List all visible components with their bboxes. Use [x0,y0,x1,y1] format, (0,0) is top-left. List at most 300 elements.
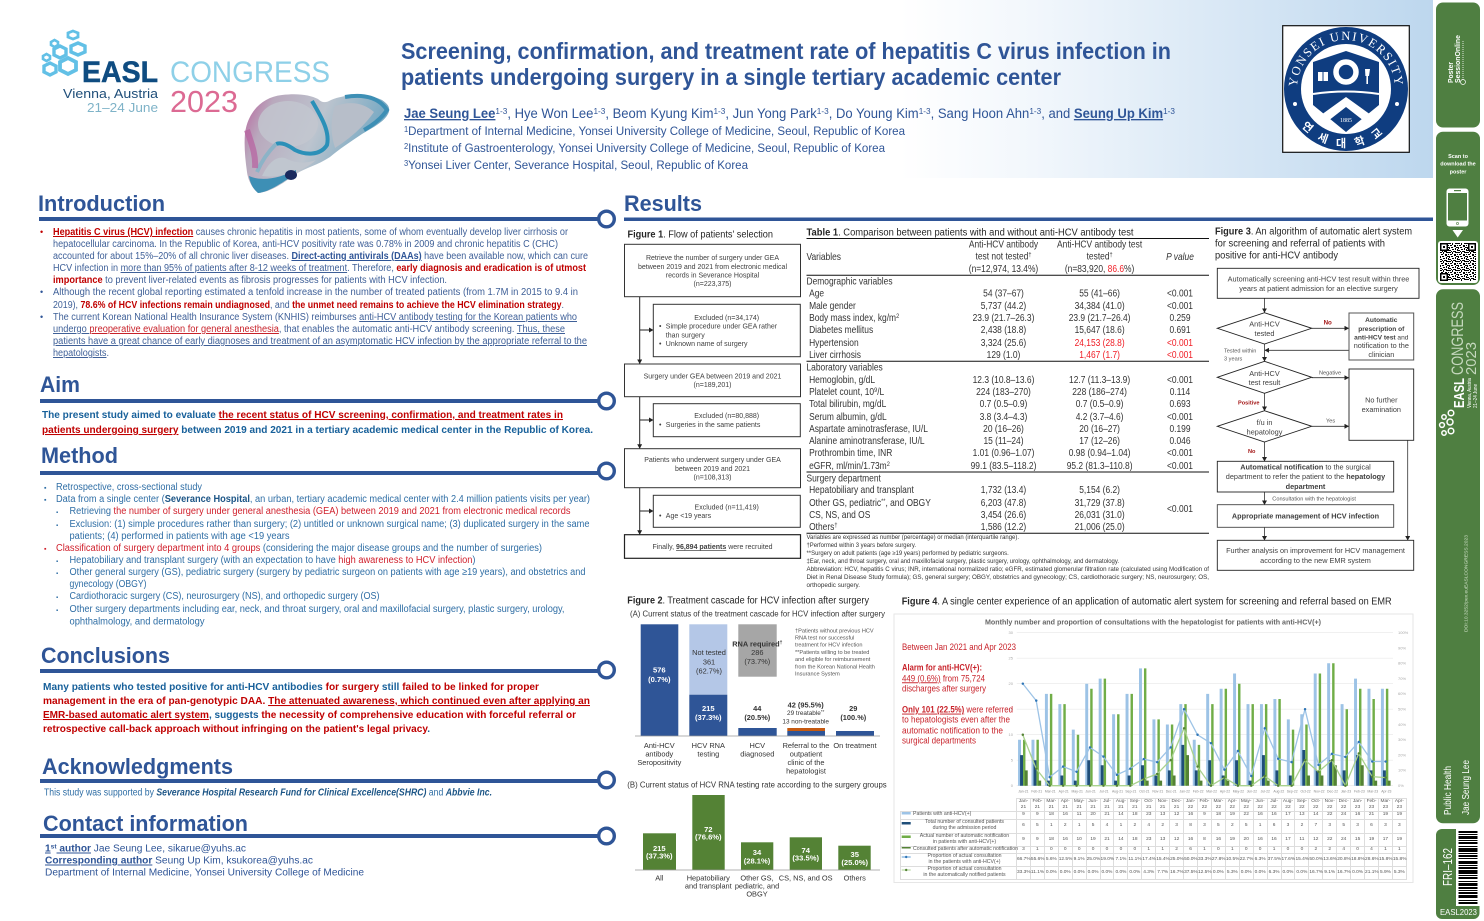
chart A: cascade bars: (0.7%) [648,675,671,684]
decision: follow-up in hepatology: f/u in [1257,418,1272,427]
row labels: Laboratory variables [806,362,883,373]
introduction bullets: accounted for about 15%–20% of all chronic liver diseases. Direct-acting antivirals (DAAs) have been available now, which can cure [53,251,588,262]
EASL wordmark: EASL [82,56,158,89]
table: monthly consultation data: 11.1% [1031,870,1044,875]
row labels: Demographic variables [806,276,893,287]
introduction bullets: Hepatitis C virus (HCV) infection causes chronic hepatitis in most patients, some of whom eventually develop liver cirrhosis or [53,227,569,238]
table: monthly consultation data: Jan- [1186,799,1195,804]
table: monthly consultation data: Mar- [1380,799,1390,804]
right axis labels: 100% [1398,630,1409,635]
row labels: Liver cirrhosis [809,350,861,360]
EASL2023 tag: EASL2023 [1440,907,1477,917]
column: tested: 0.98 (0.94–1.04) [1069,448,1130,458]
table: monthly consultation data: 1 [1147,847,1150,852]
column: tested [1057,239,1143,532]
left axis labels: 20 [1009,681,1014,686]
table: monthly consultation data: 21 [1049,805,1054,810]
column: P value: <0.001 [1167,350,1193,360]
table: monthly consultation data: 28.6% [1365,857,1379,862]
label: tested within 3 years [1224,349,1256,362]
table: monthly consultation data: 25.0% [1087,857,1100,862]
table: monthly consultation data: 23 [1355,805,1360,810]
table: monthly consultation data: 11 [1077,812,1082,817]
table: monthly consultation data: 1 [1036,847,1039,852]
Poster Session Online logo: Poster [1446,62,1455,83]
table: monthly consultation data: 7.7% [1157,870,1168,875]
column: not tested: † [1028,252,1031,259]
table: monthly consultation data: during the admission period [933,825,996,831]
box: automatic screening: Automatically screening anti-HCV test result within three [1228,274,1409,284]
label: Negative: Negative [1319,371,1341,377]
figure 4 caption: Figure 4. A single center experience of an application of automatic alert system for screening and referral based on EMR [902,596,1392,608]
conclusions text: EMR-based automatic alert system, suggests the necessity of comprehensive education with forceful referral or [43,709,576,721]
row labels: , and OBGY [885,498,931,508]
table: monthly consultation data: 16 [1355,812,1360,817]
table: monthly consultation data: Oct- [1311,799,1320,804]
decision: test result: Anti-HCV [1249,369,1280,378]
title [401,38,1171,90]
table: monthly consultation data: 3 [1175,823,1178,828]
bars: total consulted patients [1020,745,1386,786]
method list: Data from a single center (Severance Hospital, an urban, tertiary academic medical center with 2.4 million patients visits per year) [56,494,590,505]
table: monthly consultation data: 3 [1287,823,1289,828]
left axis labels: 15 [1009,706,1014,712]
row labels: CS, NS, and OS [809,510,870,520]
method list: gynecology (OBGY) [70,579,146,590]
table: monthly consultation data: 21 [1090,805,1096,810]
table: monthly consultation data: Jan- [1353,799,1362,804]
chart A: cascade bars: † [780,640,783,646]
logo: Yonsei University seal [1282,25,1410,153]
download caption: download the [1440,162,1476,168]
column: tested: 15,647 (18.6) [1075,325,1125,335]
table: monthly consultation data: 0.0% [1088,870,1099,875]
table: monthly consultation data: 22 [1188,805,1193,810]
table: monthly consultation data: Dec- [1172,799,1182,804]
table: monthly consultation data: 14 [1118,812,1124,817]
table footnotes: Variables are expressed as number (percentage) or median (interquartile range). [806,535,1019,541]
chart A: axis labels: outpatient [790,749,822,758]
table: monthly consultation data: Apr- [1061,799,1070,804]
table: monthly consultation data: 21 [1104,812,1110,817]
table: monthly consultation data: 2 [1301,823,1303,828]
chart A: axis labels: hepatologist [786,766,826,775]
section: Acknowledgments [40,754,614,798]
box: further analysis: according to the new EMR system [1260,556,1371,565]
month labels: Apr-22 [1220,790,1230,794]
month labels: Sep-21 [1125,790,1136,794]
method list: ▪ [56,571,58,577]
table: monthly consultation data: Proportion of actual consultation [927,866,1002,872]
table: monthly consultation data: 1 [1161,847,1164,852]
chart A: cascade bars: 361 [703,657,715,666]
table footnotes: orthopedic surgery. [806,583,860,589]
table footnotes: **Surgery on adult patients (age ≥19 years) performed by pediatric surgeons. [806,551,1009,557]
table: monthly consultation data: 0.0% [1282,870,1293,875]
table: monthly consultation data: 16.7% [1170,870,1184,875]
table: monthly consultation data: Sep- [1130,799,1140,804]
congress wordmark: 2023 [1463,342,1480,375]
chart A: axis labels: clinic of the [788,758,824,767]
conclusions text: retrospective call-back approach without infringing on the patient's legal privacy. [43,723,430,735]
column: not tested: 1.01 (0.96–1.07) [973,448,1034,458]
table: monthly consultation data: 9 [1022,812,1025,817]
month labels: Jan-23 [1341,790,1351,794]
month labels: Oct-22 [1301,790,1311,794]
introduction bullets: HCV infection in more than 95% of patients after 8-12 weeks of treatment. Therefore, early diagnosis and eradication is of utmost [53,263,587,274]
box: automatic prescription: clinician [1368,350,1394,359]
table: monthly consultation data: 22 [1327,805,1332,810]
flow box: excluded 34,174: than surgery [666,332,705,340]
table footnotes [806,535,1209,589]
table: monthly consultation data: 13.6% [1323,857,1337,862]
table: monthly consultation data: Feb- [1200,799,1209,804]
method list: ▪ [44,546,47,553]
authors and affiliations: , Do Young Kim [829,106,919,121]
column: not tested: (n=12,974, 13.4%) [969,264,1038,274]
table: monthly consultation data: 5.6% [1046,857,1057,862]
method list: Cardiothoracic surgery (CS), neurosurgery (NS), and orthopedic surgery (OS) [70,591,380,602]
column: tested: 4.2 (3.7–4.6) [1076,412,1123,422]
section: Contact information [40,811,614,878]
table: monthly consultation data: 8 [1189,823,1192,828]
table: monthly consultation data: 19 [1383,812,1388,817]
decision: anti-HCV tested: tested [1255,329,1274,338]
table: monthly consultation data: 0.0% [1102,870,1112,875]
month labels: Jun-22 [1247,790,1257,794]
table: monthly consultation data: 2 [1314,847,1317,852]
table: monthly consultation data: 5 [1342,823,1345,828]
chart A: footnote: RNA test nor successful [795,635,854,641]
right axis labels: 20% [1398,752,1406,757]
table: monthly consultation data: 8 [1203,837,1206,842]
flow box: excluded 34,174: • [659,341,662,348]
table: monthly consultation data: 3 [1384,823,1387,828]
decision: test result [1217,361,1312,393]
column: tested: (n=83,920, 86.6%) [1065,264,1134,274]
box: further analysis [1217,540,1414,570]
authors and affiliations: Seung Up Kim [1074,106,1163,121]
heading: Acknowledgments [42,754,233,779]
authors and affiliations: Yonsei Liver Center, Severance Hospital, Seoul, Republic of Korea [408,158,748,172]
table: monthly consultation data: 1 [1078,823,1080,828]
table footnotes: Diet in Renal Disease Study formula); GS, general surgery; OBGY, obstetrics and gynecology; CS, cardiothoracic surgery; NS, neurosurgery; OS, [806,575,1209,581]
chart A: cascade bars: ** [821,709,825,714]
table: monthly consultation data: 0 [1120,847,1122,852]
table: monthly consultation data: Feb- [1032,799,1042,804]
contact text: author [57,844,91,854]
markers: proportion in automatically notified patients [1023,728,1386,786]
introduction bullets: importance to prevent liver-related events as fibrosis progresses for patients with HCV infection. [53,275,447,286]
table: monthly consultation data: 2 [1231,823,1234,828]
table: monthly consultation data: Patients with anti-HCV(+) [913,811,971,817]
column: tested: 0.7 (0.5–0.9) [1076,399,1123,409]
method list: Classification of surgery department into 4 groups (considering the major disease groups and the number of surgeries) [56,543,542,554]
month labels: Jun-21 [1085,790,1096,794]
chart B: axis labels: All [655,874,664,882]
box: no further examination: No further [1365,396,1398,404]
introduction bullets [40,227,588,359]
table: monthly consultation data: 17.6% [1282,857,1295,862]
download caption: poster [1450,170,1467,176]
table: monthly consultation data: 0 [1356,847,1359,852]
table: monthly consultation data: Mar- [1046,799,1056,804]
flow box: surgery under GEA: (n=189,201) [694,382,731,389]
table: monthly consultation data: 22 [1216,805,1221,810]
table: monthly consultation data: 22 [1271,805,1277,810]
column: tested: 95.2 (81.3–110.8) [1067,461,1133,471]
logo: Yonsei University seal: YONSEI UNIVERSITY [1288,32,1403,86]
table: monthly consultation data: 12.5% [1059,857,1072,862]
sidebar: download panel [1436,132,1480,285]
topic: Public Health [1442,766,1454,815]
table: monthly consultation data: in patients with anti-HCV(+) [933,839,996,845]
table: monthly consultation data: 18 [1132,837,1138,842]
table: monthly consultation data: 21.1% [1365,870,1379,875]
2023 wordmark: 2023 [170,84,238,119]
callout: alert summary: automatic notification to the [902,725,1003,735]
month labels: Jan-22 [1180,790,1190,794]
heading: Introduction [38,191,165,216]
table: monthly consultation data: May- [1074,799,1084,804]
table: monthly consultation data: 0.0% [1129,870,1140,875]
table: monthly consultation data: 20 [1090,812,1096,817]
flow box: excluded 34,174 [653,304,800,357]
table: monthly consultation data: 1 [1050,823,1053,828]
flow box: excluded 11,419: • [659,513,662,520]
DOI: DOI:10.3252/pex.euEASLCONGRESS.2023 [1464,535,1470,632]
right axis labels: 80% [1398,661,1406,666]
table: monthly consultation data: 5 [1092,823,1094,828]
chart title: Monthly number and proportion of consultations with the hepatologist for patients with anti-HCV(+) [985,620,1321,627]
figure 3 caption: for screening and referral of patients with [1215,238,1385,250]
column: tested: 55 (41–66) [1079,288,1120,299]
table: monthly consultation data: Dec- [1339,799,1349,804]
authors and affiliations: 1-3 [593,106,606,116]
table: monthly consultation data: 16 [1063,837,1068,842]
table: monthly consultation data: 19 [1230,812,1235,817]
column: tested: 26,031 (31.0) [1075,510,1125,520]
introduction bullets: undergo preoperative evaluation for general anesthesia, that enables the automatic anti-HCV antibody screening. Thus, these [53,324,565,335]
figure 2 caption: Figure 2. Treatment cascade for HCV infection after surgery [627,596,869,606]
introduction bullets: patients have a great chance of early diagnoses and treatment of an asymptomatic HCV infection by the appropriate referral to the [53,336,587,347]
table: monthly consultation data: 21 [1118,805,1124,810]
column: tested: 23.9 (21.7–26.4) [1069,313,1130,323]
column: tested: 31,729 (37.8) [1075,498,1125,508]
column: tested: 34,384 (41.0) [1075,301,1125,311]
table: monthly consultation data: 16 [1257,812,1263,817]
table: monthly consultation data: Sep- [1297,799,1307,804]
flow box: excluded 11,419: Excluded (n=11,419) [695,504,759,512]
poster ID: FRI–162 [1440,848,1455,886]
header gradient background [900,0,1433,178]
table: monthly consultation data: 22.7% [1240,857,1253,862]
chart A: cascade bars: (62.7%) [696,667,722,676]
chart A: footnote: Insurance System [795,672,840,678]
label: Yes: Yes [1326,418,1335,424]
table: monthly consultation data: 21 [1104,805,1110,810]
table: monthly consultation data: 23 [1146,837,1151,842]
chart A: footnote: from the Korean National Health [795,664,875,670]
table: monthly consultation data: 20.8% [1337,857,1351,862]
table: monthly consultation data: 19 [1397,812,1402,817]
month labels: Feb-23 [1354,790,1365,794]
month labels: Dec-21 [1166,790,1177,794]
table: monthly consultation data: 2 [1134,823,1136,828]
chart A: footnote: and eligible for reimbursement [795,657,871,663]
row labels: Aspartate aminotrasferase, IU/L [809,424,928,434]
table: monthly consultation data: 19 [1397,837,1402,842]
congress wordmark: CONGRESS [1448,302,1467,375]
table: monthly consultation data: 1 [1203,847,1206,852]
decision: test result: test result [1249,378,1280,387]
chart A: footnote [795,628,875,678]
left axis labels [1009,630,1014,788]
sidebar: poster ID panel [1436,828,1480,919]
row labels: Surgery department [806,473,881,484]
row labels: Male gender [809,301,856,311]
row labels: Alanine aminotransferase, IU/L [809,436,925,446]
label: Positive: Positive [1238,400,1259,406]
table: monthly consultation data: 0.0% [1213,870,1224,875]
box: automatic prescription [1349,313,1414,360]
aim text: patients undergoing surgery between 2019 and 2021 in a tertiary academic medical center in the Republic of Korea. [42,424,593,436]
contact text: Corresponding author Seung Up Kim, ksukorea@yuhs.ac [45,856,313,866]
table: monthly consultation data: 0.0% [1074,870,1085,875]
Poster Session Online logo [1446,35,1466,84]
table: monthly consultation data: 0.0% [1255,870,1266,875]
figure 4: automatic alert experience [894,596,1413,882]
table: monthly consultation data: 0.0% [1296,870,1307,875]
flow box: excluded 34,174: • [659,324,662,330]
table: monthly consultation data: 15 [1355,837,1360,842]
column: P value: P value [1166,251,1194,262]
column: P value [1166,251,1194,514]
column: P value: 0.199 [1169,424,1191,434]
title: patients undergoing surgery in a single tertiary academic center [401,64,1061,90]
table: monthly consultation data: 16 [1188,812,1193,817]
right axis labels: 0% [1398,783,1404,788]
table: monthly consultation data: Jan- [1019,799,1028,804]
table caption: Table 1. Comparison between patients with and without anti-HCV antibody test [806,228,1134,238]
flow box: retrieved surgeries: records in Severance Hospital [666,272,760,280]
table: monthly consultation data: 0 [1050,847,1053,852]
table: monthly consultation data: 23 [1369,805,1374,810]
chart B: RNA testing bars: (33.5%) [792,854,819,863]
flow box: excluded 80,888 [653,404,800,437]
location: Vienna, Austria [63,86,159,101]
logo: Yonsei University seal: 1885 [1340,118,1352,124]
chart B: RNA testing bars: 34 [753,848,762,857]
table: monthly consultation data: 0 [1301,847,1303,852]
method list [44,482,590,628]
table: monthly consultation data: 5 [1036,823,1039,828]
label: No after follow-up: No [1248,449,1256,455]
table: monthly consultation data: Proportion of actual consultation [927,853,1002,859]
table: monthly consultation data: 17 [1383,837,1388,842]
chart B: axis labels: and transplant [685,882,732,890]
table: monthly consultation data: 6 [1273,823,1275,828]
chart B: axis labels: Hepatobiliary [687,874,730,882]
table: monthly consultation data: 22 [1327,837,1332,842]
column: not tested: 3,454 (26.6) [981,510,1026,520]
chart A: cascade bars: (100.%) [840,713,867,722]
sidebar: Poster Session Online panel [1436,2,1480,128]
figure 3 caption: Figure 3. An algorithm of automatic alert system [1215,226,1412,238]
column: not tested: 224 (183–270) [976,387,1031,397]
month labels: Apr-21 [1059,790,1069,794]
column: not tested: 2,438 (18.8) [981,325,1026,335]
table: monthly consultation data: 2 [1161,823,1164,828]
table: monthly consultation data: 22 [1341,805,1346,810]
method list: ▪ [56,595,58,601]
aim text: The present study aimed to evaluate the recent status of HCV screening, confirmation, and treatment rates in [42,409,563,421]
month labels: May-21 [1072,790,1083,794]
table: monthly consultation data: 14 [1313,812,1318,817]
table: monthly consultation data: 22 [1327,812,1332,817]
table: monthly consultation data: 9 [1036,812,1039,817]
congress wordmark: Vienna, Austria [1467,377,1473,408]
chart A: axis labels: antibody [645,749,674,758]
table: monthly consultation data: 37.5% [1184,870,1198,875]
chart A: cascade bars: 42 (95.5%) [788,700,824,710]
table: monthly consultation data: 19 [1090,837,1096,842]
table: monthly consultation data: 0 [1134,847,1136,852]
label: consultation: Consultation with the hepatologist [1272,496,1356,502]
table: monthly consultation data: 18.8% [1351,857,1365,862]
column: not tested: 12.3 (10.8–13.6) [973,375,1034,385]
panel A heading: (A) Current status of the treatment cascade for HCV infection after surgery [630,608,886,618]
box: appropriate management: Appropriate management of HCV infection [1232,512,1379,520]
table: monthly consultation data: 22 [1299,805,1305,810]
chart A: cascade bars: Not tested [692,648,726,657]
authors and affiliations: , Beom Kyung Kim [605,106,713,121]
table: monthly consultation data: in the patients with anti-HCV(+) [929,859,1000,865]
flow box: underwent surgery: between 2019 and 2021 [675,466,750,473]
authors and affiliations: , Hye Won Lee [507,106,593,121]
introduction bullets: hepatocellular carcinoma. In the Republic of Korea, anti-HCV positivity rate was 0.78% in 2009 and chronic hepatitis C (CHC) [53,239,558,250]
month labels: Nov-22 [1314,790,1325,794]
table: monthly consultation data: 2 [1328,847,1331,852]
box: automatical notification: Automatical notification to the surgical [1240,462,1371,472]
table: monthly consultation data: 0 [1078,847,1080,852]
row labels: Total bilirubin, mg/dL [809,399,886,409]
row labels: Platelet count, 10 [809,387,874,397]
authors and affiliations: 2 [404,142,409,151]
table: monthly consultation data: 3 [1398,823,1401,828]
chart A: cascade bars: 13 non-treatable [782,718,829,726]
table: monthly consultation data: Oct- [1144,799,1153,804]
chart A: footnote: **Patients willing to be treated [795,650,869,656]
table: monthly consultation data: 15.4% [1295,857,1309,862]
logo: Yonsei University seal: 연세대학교 [1302,122,1383,148]
table: monthly consultation data: 24 [1341,812,1346,817]
bars: automatic notifications [1023,663,1388,786]
table: monthly consultation data: 15.8% [1379,857,1393,862]
table: monthly consultation data: May- [1241,799,1252,804]
chart B: RNA testing bars [635,795,880,870]
left axis labels: 30 [1009,630,1014,635]
chart A: cascade bars [635,624,880,736]
box: no further examination: examination [1362,405,1401,414]
box: automatic prescription: notification to the [1354,341,1409,350]
method list: ophthalmology, and dermatology [70,616,204,628]
callout: alert summary: Only 101 (22.5%) were referred [902,705,1013,715]
figure 3 caption [1215,226,1412,262]
row labels: Serum albumin, g/dL [809,412,887,422]
table: monthly consultation data: 12 [1174,837,1179,842]
method list: patients; (4) performed in patients with age <19 years [70,531,290,542]
